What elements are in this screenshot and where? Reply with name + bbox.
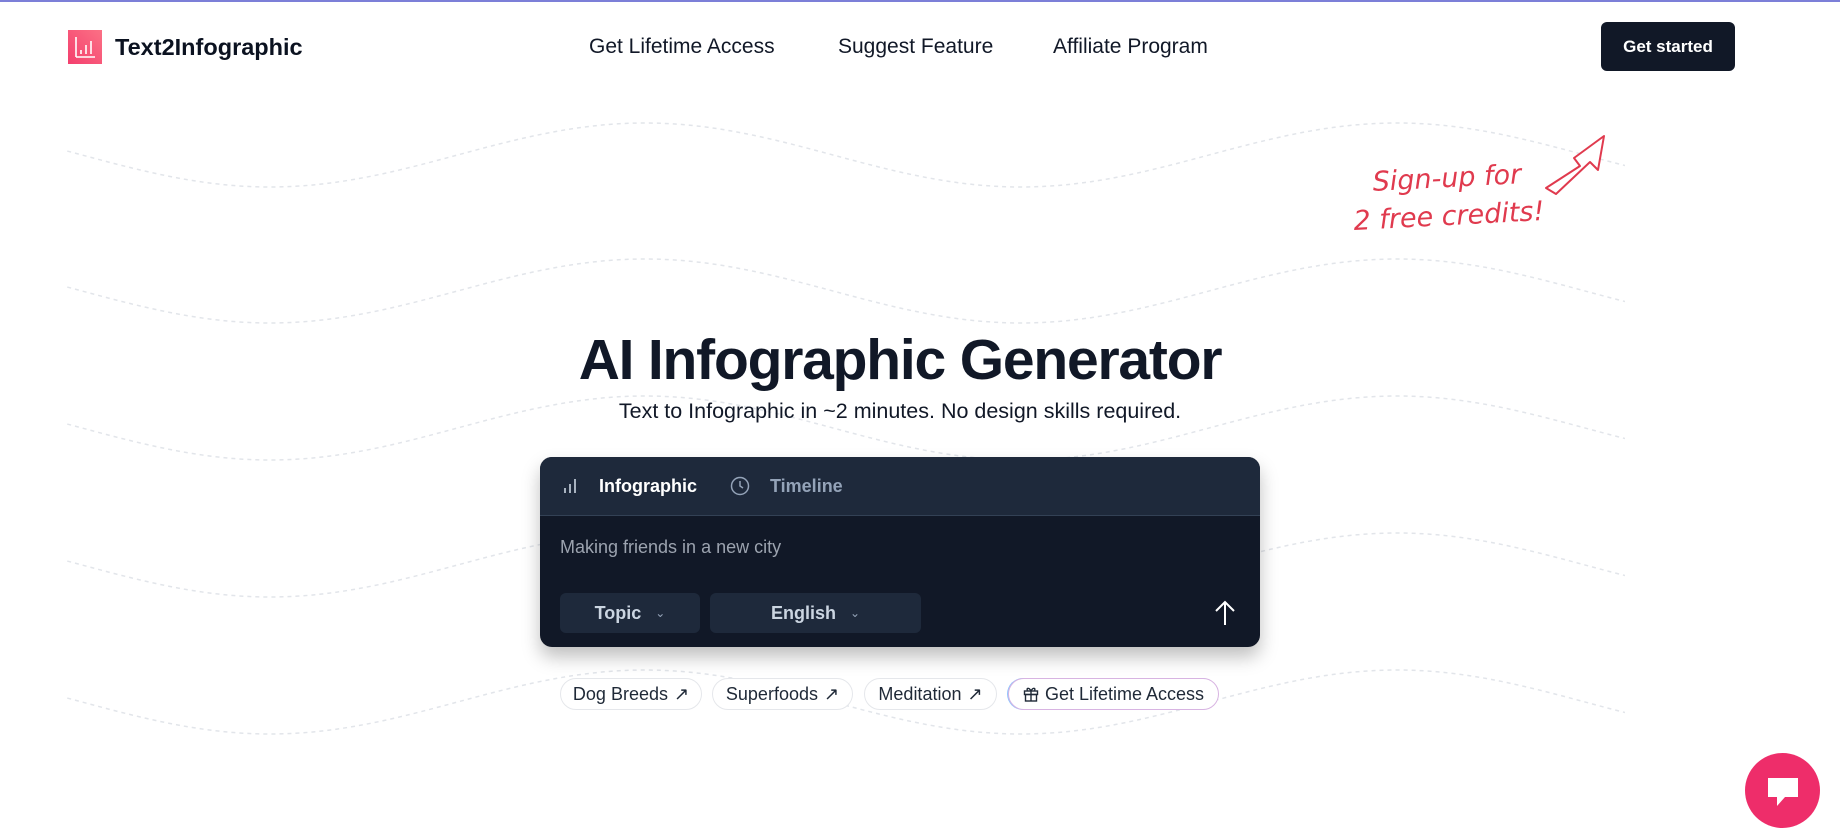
icon: submit arrow	[1215, 600, 1235, 625]
tab bar	[540, 457, 1260, 516]
dropdown: English: English	[771, 602, 836, 622]
callout: sign-up for free credits: 2 free credits!	[1353, 196, 1545, 237]
tab: Infographic: Infographic	[599, 476, 697, 496]
background wavy dashed lines	[67, 122, 1625, 735]
callout: sign-up for free credits	[1353, 159, 1545, 237]
chip: Meditation: ↗	[967, 684, 983, 704]
chip: Dog Breeds: ↗	[674, 684, 689, 704]
title: AI Infographic Generator	[579, 328, 1221, 392]
icon: bar chart	[564, 479, 576, 493]
chip: Dog Breeds	[560, 678, 702, 710]
arrow: pointing to Get started	[1545, 135, 1605, 195]
icon: gift	[1024, 688, 1038, 702]
subtitle: Text to Infographic in ~2 minutes. No design skills required.	[619, 399, 1181, 423]
logo	[68, 30, 303, 64]
chip: Get Lifetime Access	[1008, 678, 1219, 710]
button: Get started: Get started	[1623, 36, 1713, 56]
dropdown: Topic: Topic	[595, 602, 641, 622]
nav: Get Lifetime Access: Get Lifetime Access	[589, 35, 775, 58]
button: Get started	[1601, 22, 1735, 71]
chip: Superfoods	[712, 678, 853, 710]
icon: clock	[730, 476, 750, 496]
panel: generator input card	[540, 457, 1260, 647]
brand name: Text2Infographic	[115, 34, 303, 60]
top accent line	[0, 0, 1840, 2]
callout: sign-up for free credits: Sign-up for	[1372, 159, 1522, 198]
chip: Superfoods: ↗	[824, 684, 839, 704]
chip: Dog Breeds: Dog Breeds	[573, 684, 668, 704]
dropdown: Topic	[560, 593, 700, 633]
chip: Get Lifetime Access: Get Lifetime Access	[1045, 684, 1204, 704]
icon: chat bubble	[1745, 753, 1820, 828]
icon: logo chart	[68, 30, 102, 64]
chip: Superfoods: Superfoods	[726, 684, 818, 704]
nav: Affiliate Program: Affiliate Program	[1053, 35, 1208, 58]
dropdown: Topic: ⌄	[655, 606, 665, 620]
placeholder text: Making friends in a new city	[560, 537, 781, 557]
tab: Timeline: Timeline	[770, 476, 843, 496]
dropdown: English	[710, 593, 921, 633]
nav: Suggest Feature: Suggest Feature	[838, 35, 993, 58]
dropdown: English: ⌄	[850, 606, 860, 620]
chip: Meditation: Meditation	[878, 684, 961, 704]
chip: Meditation	[864, 678, 997, 710]
